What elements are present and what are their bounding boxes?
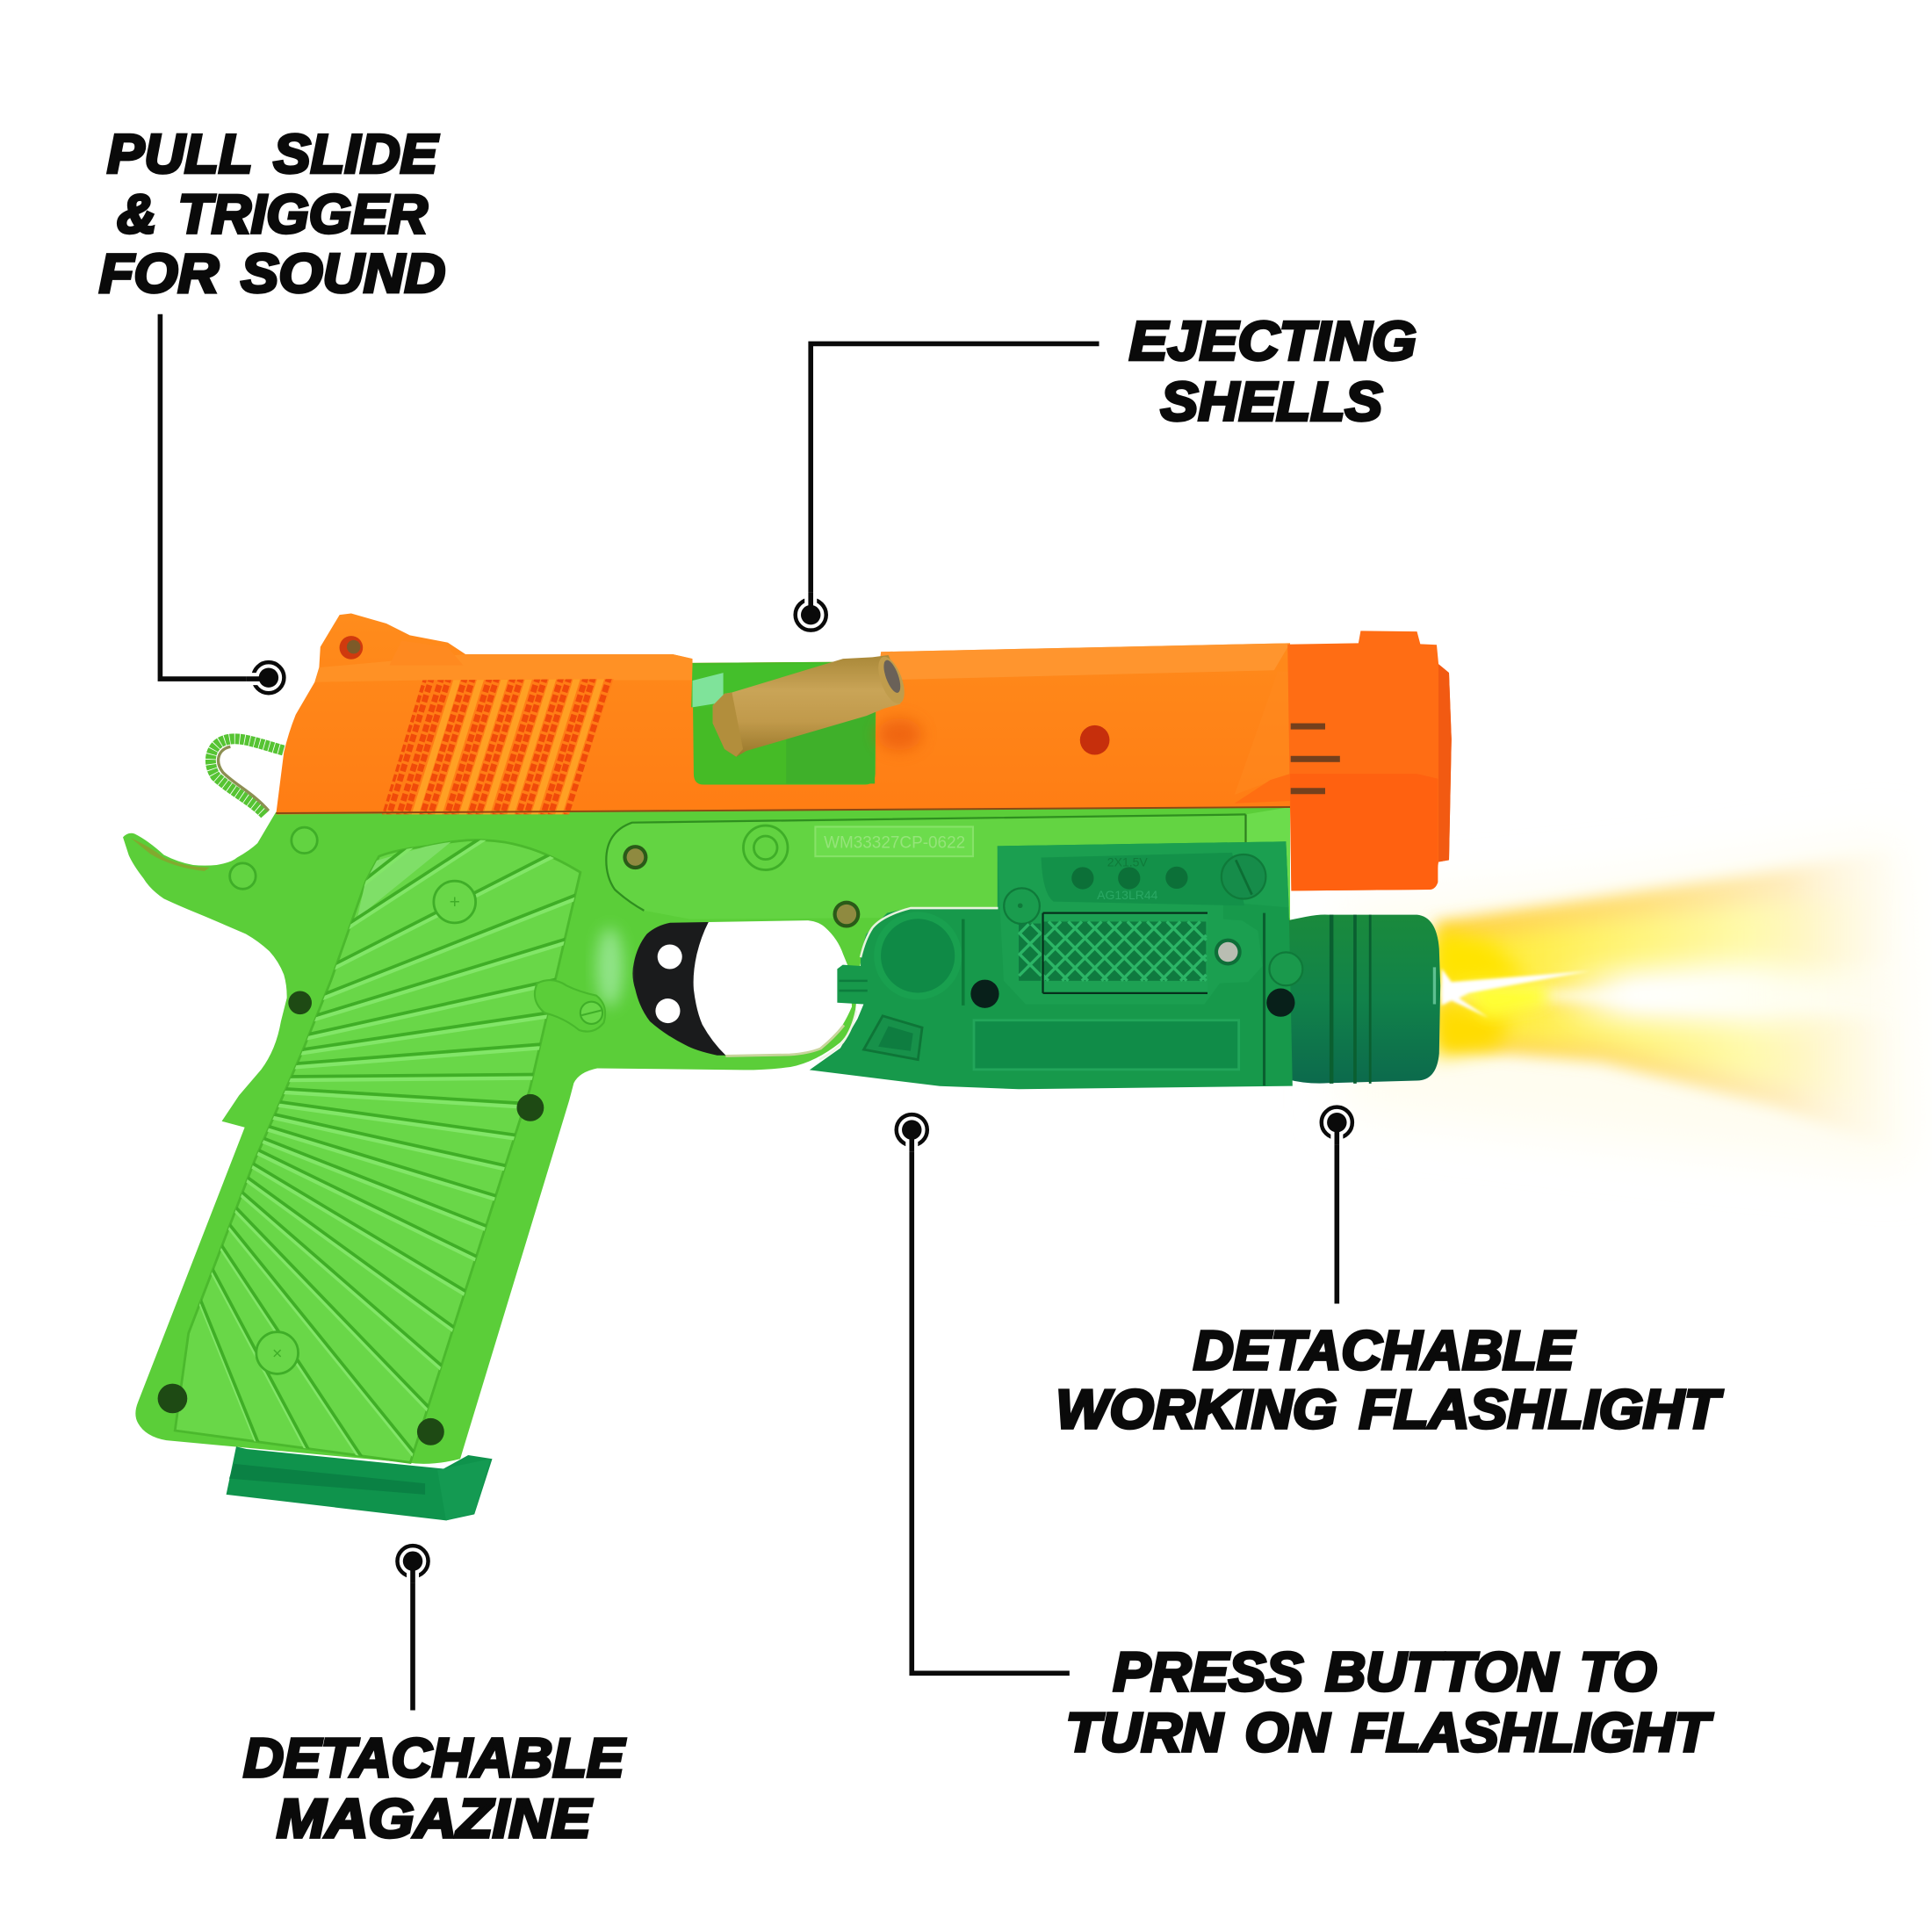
flashlight (810, 841, 1440, 1089)
white rim (861, 908, 998, 957)
target marker (897, 1114, 927, 1152)
label text: MAGAZINE (277, 1789, 593, 1849)
ejection port (691, 661, 876, 784)
grip panel (174, 839, 581, 1464)
vertical groove (962, 919, 964, 1006)
side groove (1263, 913, 1265, 1085)
lower amber band (1436, 998, 1904, 1150)
grip ray highlights (199, 840, 574, 1457)
target marker (247, 662, 284, 693)
rail details (998, 841, 1289, 1004)
grip screw bottom (256, 1332, 299, 1373)
target marker (1322, 1107, 1352, 1144)
front chamfer (1235, 672, 1290, 795)
trigger guard lower edge shade (725, 1025, 844, 1056)
model number plate: WM33327CP-0622 (824, 833, 965, 852)
hot yellow middle (1462, 985, 1546, 1018)
rivets (230, 825, 788, 889)
slide shadow beside port (877, 718, 921, 750)
callout: ejecting shells (796, 312, 1417, 631)
leader line (1335, 1138, 1338, 1303)
rear lanyard loop (211, 739, 284, 814)
callout: pull slide and trigger (99, 124, 445, 693)
switch tab ridges (839, 981, 868, 991)
ejected shell (713, 653, 910, 757)
label text: DETACHABLE (1193, 1321, 1575, 1381)
label text (1129, 312, 1417, 432)
soft halo (1343, 838, 1910, 1171)
white core (1555, 963, 1849, 1029)
upper plate (606, 814, 1245, 919)
leader line (160, 314, 254, 679)
body screws (970, 980, 999, 1008)
plate front edge (1244, 814, 1246, 850)
target marker (796, 593, 826, 631)
frame (123, 806, 1290, 1464)
label text (243, 1728, 626, 1849)
rear sight screw (340, 636, 363, 660)
battery door grid (1019, 913, 1242, 993)
pistol (123, 613, 1452, 1521)
model number plate (815, 826, 973, 856)
callout: detachable magazine (243, 1546, 626, 1849)
slide seam (276, 807, 1290, 813)
lower lemon beam (1442, 1000, 1885, 1109)
label text: SHELLS (1161, 371, 1382, 432)
label text: PULL SLIDE (107, 124, 439, 184)
label text: & TRIGGER (117, 184, 428, 245)
label text: EJECTING (1129, 312, 1417, 372)
grip screw top: + (450, 892, 460, 912)
upper amber band (1436, 850, 1904, 985)
grip ray grooves (200, 840, 575, 1456)
magazine base (227, 1446, 493, 1520)
leader line (811, 343, 1099, 600)
leader line (912, 1146, 1070, 1673)
label text: PRESS BUTTON TO (1114, 1642, 1656, 1703)
slide top bevel (314, 654, 693, 682)
label text: TURN ON FLASHLIGHT (1066, 1703, 1714, 1763)
white streaks (1442, 969, 1590, 1018)
front frame light band (1245, 807, 1290, 918)
upper lemon beam (1442, 899, 1885, 988)
front wedge detail (864, 1016, 922, 1060)
hot yellow lower (1436, 1004, 1510, 1057)
callout: detachable working flashlight (1056, 1107, 1724, 1440)
safety keyhole (535, 980, 605, 1032)
label text (99, 124, 445, 305)
rail details: 2X1.5V (1107, 854, 1148, 869)
label text: WORKING FLASHLIGHT (1056, 1380, 1724, 1440)
flashlight lens head (1287, 915, 1440, 1084)
callout: press button (897, 1114, 1714, 1763)
tab (1269, 952, 1302, 985)
frame screws (158, 845, 860, 1445)
grip corner facet (358, 841, 451, 916)
label text (1066, 1642, 1714, 1763)
rail details: AG13LR44 (1097, 888, 1158, 902)
grip screw bottom: × (272, 1344, 282, 1364)
flashlight body (810, 841, 1293, 1089)
flashlight beam (1343, 838, 1910, 1171)
barrel (1287, 631, 1452, 890)
label text: FOR SOUND (99, 244, 445, 305)
slide screw (1080, 725, 1109, 755)
hammer shade (131, 838, 210, 871)
label text (1056, 1321, 1724, 1440)
plate outline (606, 814, 1245, 911)
button (874, 912, 962, 999)
white rim lower (819, 1011, 856, 1060)
rear sight block (389, 641, 464, 666)
slide (276, 613, 1290, 819)
target marker (397, 1546, 429, 1583)
frame highlight near trigger (596, 928, 624, 1006)
trigger guard opening (672, 920, 852, 1056)
leader line (411, 1577, 415, 1710)
slide front bevel (881, 643, 1290, 680)
rear serrations (382, 679, 613, 815)
lower recess (974, 1020, 1239, 1070)
hot yellow upper (1436, 930, 1528, 984)
trigger (632, 922, 725, 1056)
label text: DETACHABLE (243, 1728, 626, 1789)
barrel slots (1291, 724, 1325, 730)
grip screw top (434, 881, 476, 923)
